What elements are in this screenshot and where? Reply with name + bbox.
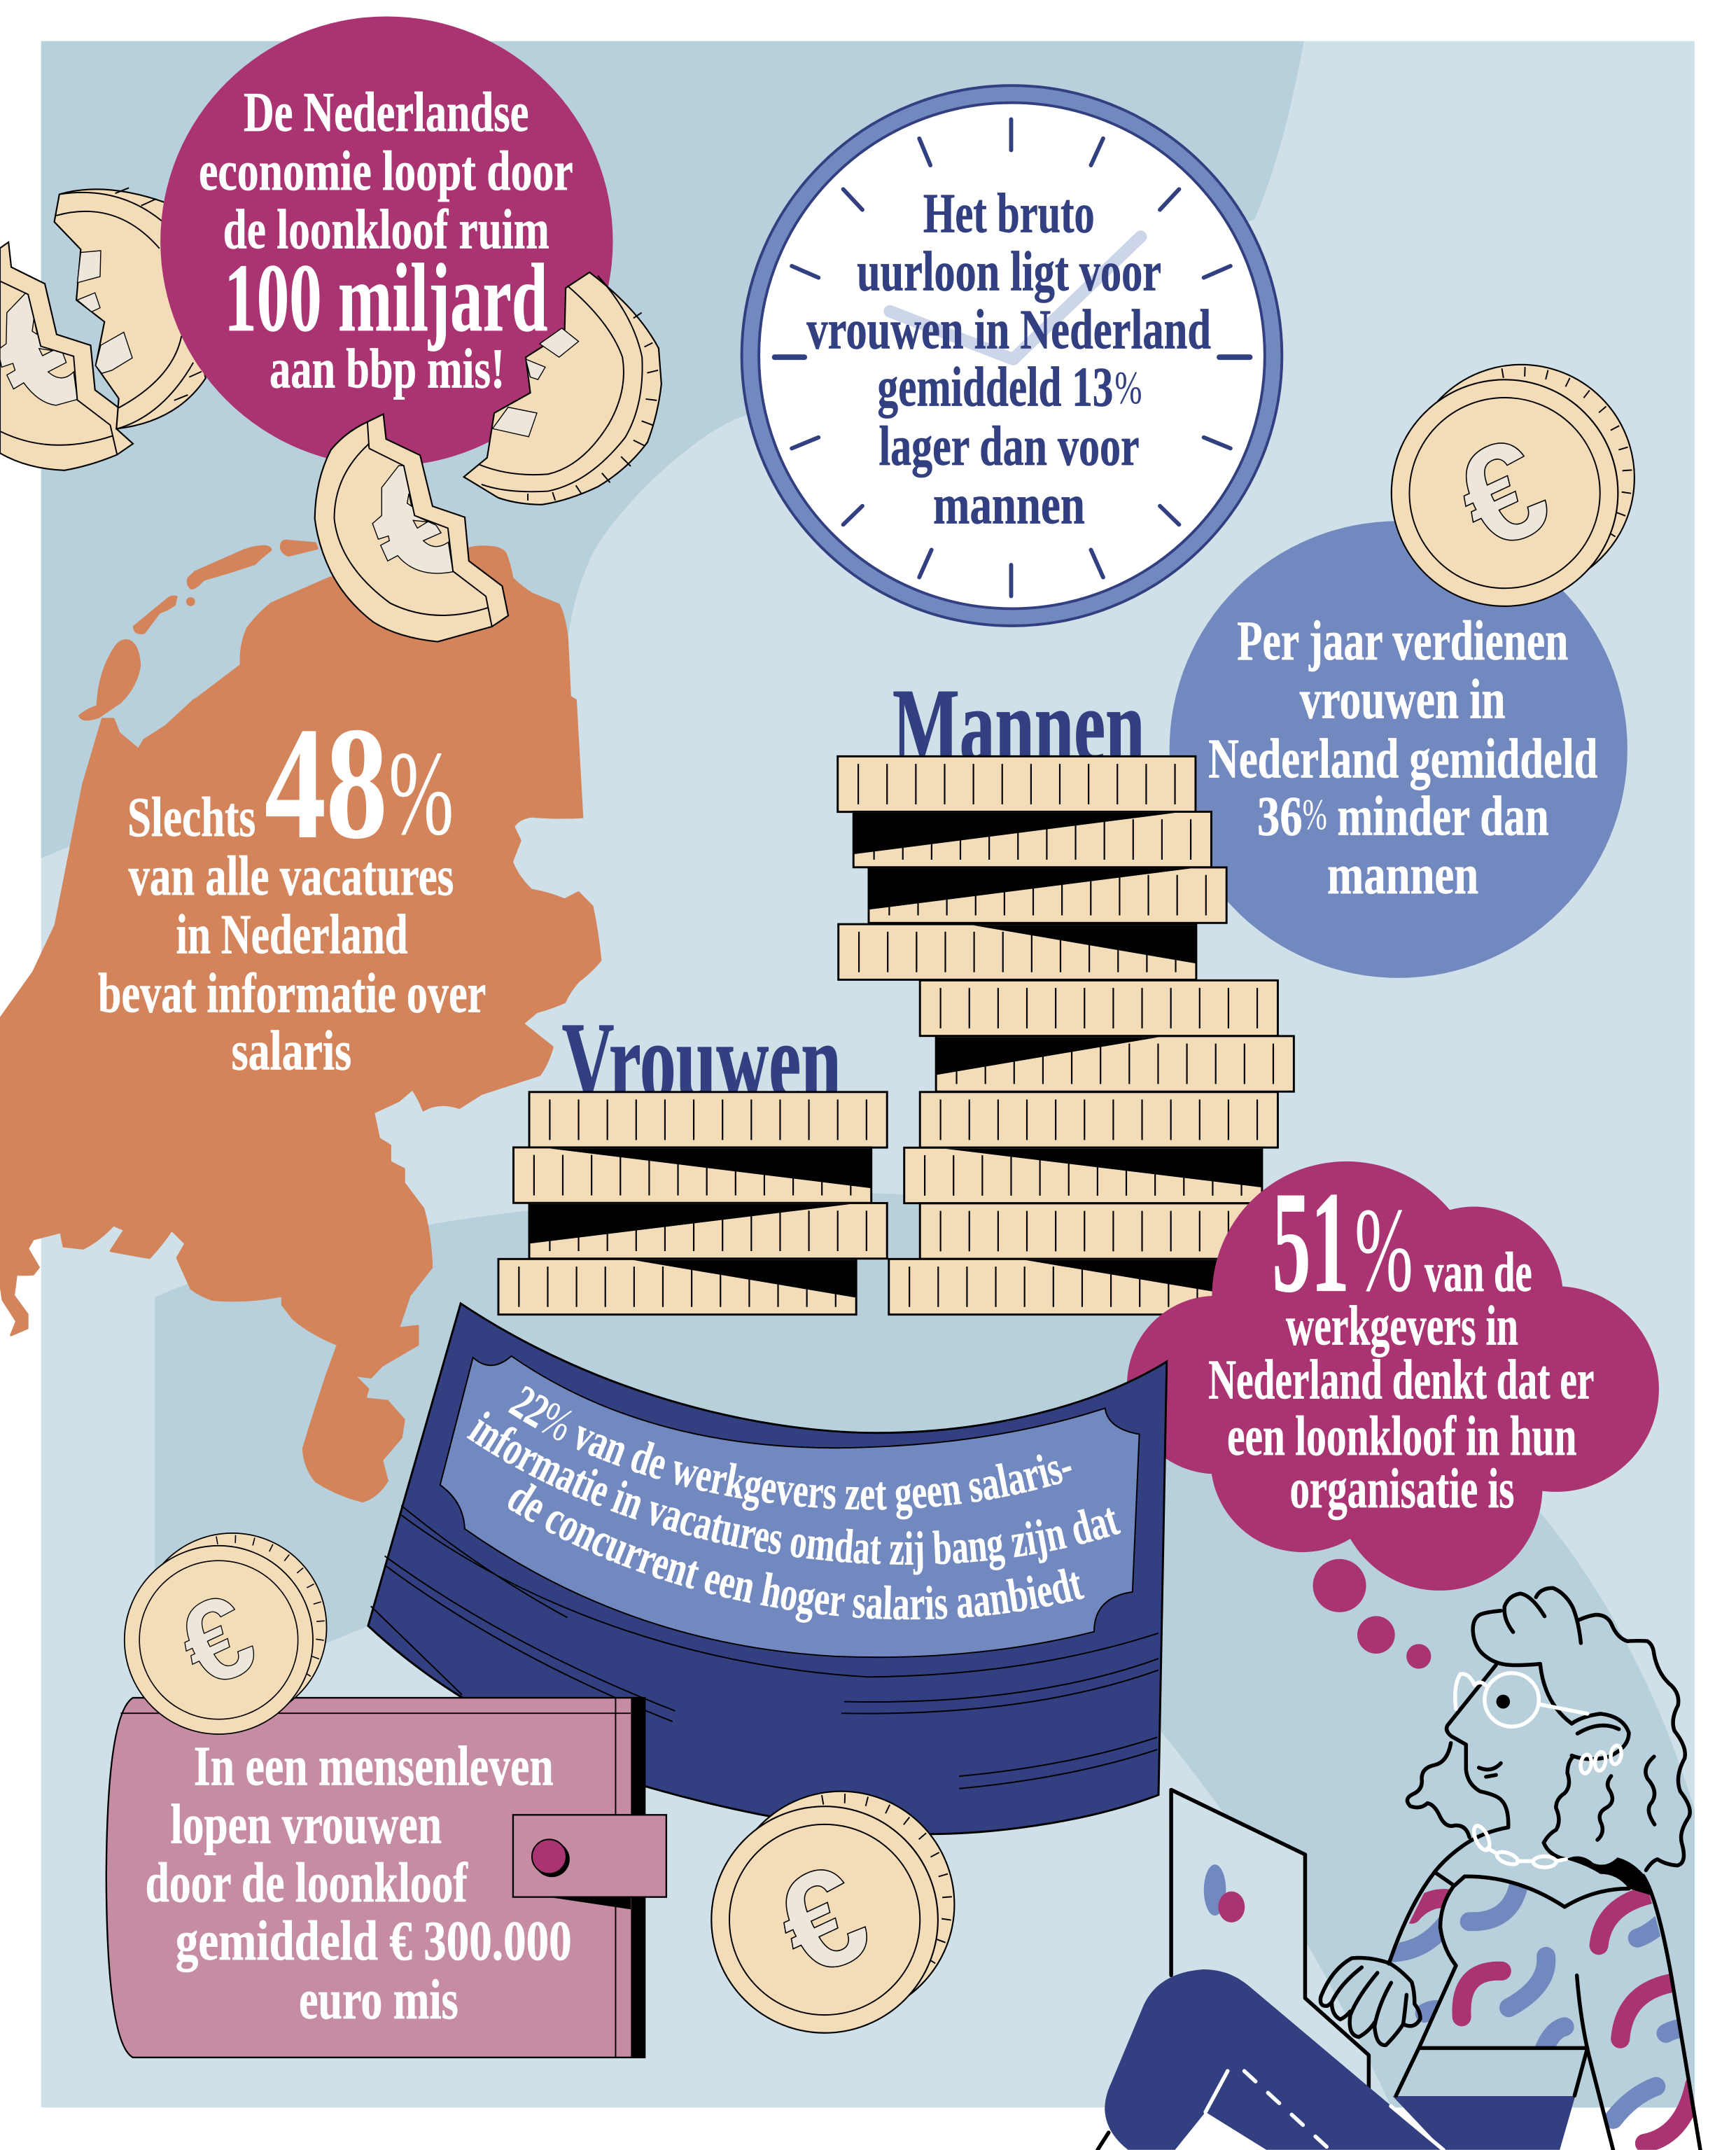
sweater outline — [1396, 1872, 1700, 2150]
mouth — [1479, 1764, 1501, 1777]
blue circle: 36%: % — [1303, 790, 1327, 839]
earrings — [1579, 1744, 1623, 1775]
wallet button — [532, 1839, 570, 1877]
broken coin: centre fragment — [315, 414, 508, 642]
laptop and legs of the person — [1098, 1790, 1575, 2150]
bubble: 100 miljard: De Nederlandse — [244, 81, 528, 144]
map text: 48% — [98, 694, 486, 1082]
wallet clasp shadow — [548, 1897, 631, 1909]
clock text: mannen — [933, 473, 1085, 536]
thought cloud: 51%: een loonkloof in hun — [1227, 1405, 1576, 1467]
bubble: 100 miljard: economie loopt door — [199, 140, 573, 202]
glasses — [1455, 1673, 1588, 1726]
hair shadow — [1566, 1857, 1653, 1896]
heading: Vrouwen: Vrouwen — [562, 1000, 841, 1123]
wallet text: lopen vrouwen — [170, 1794, 442, 1856]
thought cloud: 51% — [1127, 1161, 1659, 1591]
coin stack: Vrouwen — [498, 1092, 887, 1315]
map text: 48%: salaris — [232, 1020, 351, 1082]
wallet banner — [440, 1356, 1140, 1657]
map text: 48%: % — [388, 727, 454, 860]
thought cloud: 51%: organisatie is — [1289, 1458, 1514, 1520]
icon: euro coin bottom centre — [711, 1792, 954, 2033]
bubble: 100 miljard: aan bbp mis! — [270, 337, 505, 400]
person outline: face, neck, shoulder — [1389, 1665, 1508, 1964]
clock ticks — [775, 119, 1250, 596]
map of the Netherlands — [0, 540, 601, 1502]
map text: 48%: Slechts — [127, 786, 255, 849]
panel: big navy wallet with 22% banner — [367, 1302, 1168, 1836]
wallet text: In een mensenleven — [194, 1735, 554, 1797]
bubble: 100 miljard: 100 miljard — [224, 244, 547, 352]
icon: euro coin on wallet — [125, 1533, 327, 1734]
map text: 48%: bevat informatie over — [98, 962, 486, 1024]
heading: Mannen: Mannen — [892, 667, 1144, 784]
person outline: hair — [1407, 1588, 1690, 1870]
blue circle: 36%: Per jaar verdienen — [1237, 610, 1568, 672]
map text: 48%: van alle vacatures — [129, 845, 454, 907]
thought cloud: 51%: % — [1354, 1183, 1413, 1317]
coin stack: Mannen — [838, 756, 1294, 1315]
thought bubbles — [1313, 1559, 1431, 1669]
person upper body — [1320, 1588, 1700, 2150]
clock — [742, 85, 1282, 626]
laptop — [1171, 1790, 1368, 2096]
wallet text: gemiddeld € 300.000 — [176, 1910, 572, 1972]
broken coin: far left fragment — [0, 242, 133, 470]
blue circle: 36%: Nederland gemiddeld — [1208, 727, 1597, 790]
hand — [1320, 1957, 1420, 2045]
thought cloud: 51%: 51 — [1272, 1161, 1350, 1322]
necklace — [1471, 1822, 1566, 1867]
icon: euro coin top right — [1392, 365, 1634, 606]
wallet text: euro mis — [299, 1969, 458, 2031]
broken coin: middle fragment — [55, 188, 206, 428]
banner text: informatie in vacatures omdat zij bang zijn dat — [466, 1411, 1121, 1575]
blue circle: 36%: vrouwen in — [1300, 668, 1506, 730]
clock text: Het bruto — [923, 183, 1095, 245]
panel: pink wallet — [106, 1698, 666, 2058]
thought cloud: 51%: van de — [1424, 1241, 1532, 1304]
blue circle: 36% — [1170, 521, 1628, 978]
banner text: de concurrent een hoger salaris aanbiedt — [508, 1483, 1085, 1623]
clock text: vrouwen in Nederland — [806, 298, 1211, 361]
blue circle: 36%: 36 — [1257, 786, 1303, 848]
clock text: lager dan voor — [878, 415, 1140, 477]
wallet text: door de loonkloof — [146, 1852, 468, 1914]
sweater pattern: body and arm — [1462, 1876, 1695, 2143]
banner text: 22% van de werkgevers zet geen salaris- — [508, 1386, 1072, 1519]
map text: 48%: in Nederland — [176, 904, 408, 966]
clock text — [806, 183, 1211, 536]
clock text: uurloon ligt voor — [857, 241, 1161, 303]
wallet text — [146, 1735, 572, 2031]
wallet stitching lines — [371, 1505, 1158, 1789]
map text: 48%: 48 — [265, 694, 388, 872]
broken coin: right fragment — [464, 272, 662, 505]
thought cloud: 51%: werkgevers in — [1286, 1295, 1518, 1357]
clock text: % — [1114, 363, 1142, 414]
bubble: 100 miljard — [160, 17, 613, 466]
bubble: 100 miljard: de loonkloof ruim — [223, 198, 550, 260]
blue circle: 36%: mannen — [1327, 844, 1478, 906]
clock text: gemiddeld 13 — [878, 356, 1113, 419]
wallet clasp — [513, 1815, 666, 1897]
sweater pattern: left sleeve — [1389, 1899, 1455, 2013]
clock check mark — [890, 237, 1141, 359]
blue circle: 36%: minder dan — [1337, 786, 1549, 848]
legs — [1098, 1969, 1575, 2150]
